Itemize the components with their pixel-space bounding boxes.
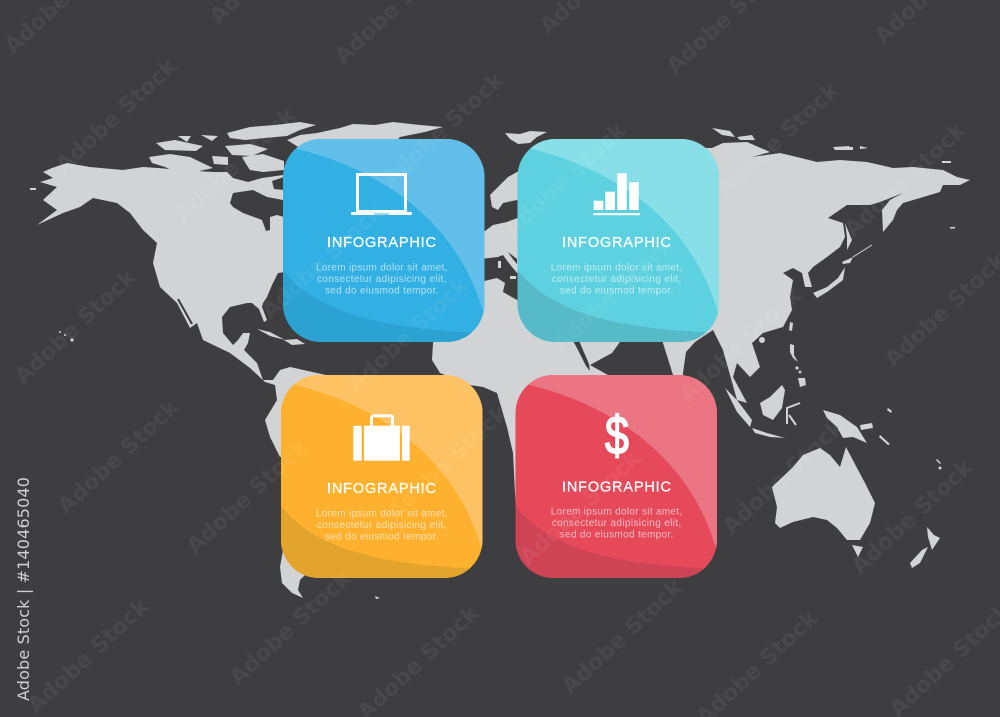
heading: INFOGRAPHIC xyxy=(327,481,436,497)
continent: North America xyxy=(37,163,340,598)
island: New Guinea xyxy=(823,410,867,443)
watermarks: Adobe Stock xyxy=(51,53,183,178)
watermarks: Adobe Stock xyxy=(557,574,689,699)
heading: INFOGRAPHIC xyxy=(562,235,671,251)
card base xyxy=(516,375,718,578)
body text: sed do eiusmod tempor. xyxy=(325,532,438,542)
watermarks: Adobe Stock xyxy=(847,454,979,579)
islands: Japan xyxy=(813,223,853,298)
watermarks: Adobe Stock xyxy=(170,102,302,227)
continent: Australia xyxy=(772,447,875,540)
island chain: Kuril xyxy=(853,245,872,257)
heading: INFOGRAPHIC xyxy=(327,235,436,251)
islands: Caribbean xyxy=(257,329,305,345)
body text: consectetur adipisicing elit, xyxy=(552,518,681,529)
watermarks: Adobe Stock xyxy=(840,117,972,242)
body text: Lorem ipsum dolor sit amet, xyxy=(316,262,447,274)
card base xyxy=(281,375,483,578)
card: red dollar xyxy=(516,375,718,578)
island: Sardinia xyxy=(498,261,501,268)
body text: Lorem ipsum dolor sit amet, xyxy=(551,262,682,274)
body text: consectetur adipisicing elit, xyxy=(317,520,446,531)
icon: laptop xyxy=(351,174,412,215)
card: blue laptop xyxy=(283,139,485,342)
watermarks: Adobe Stock xyxy=(718,414,850,539)
sea: Adriatic xyxy=(508,252,517,264)
body text xyxy=(551,506,682,540)
body text xyxy=(316,508,447,542)
islands: Philippines xyxy=(790,344,806,387)
body text: sed do eiusmod tempor. xyxy=(325,286,438,296)
icon: dollar sign: $ xyxy=(605,407,629,466)
watermarks: Adobe Stock xyxy=(225,565,357,690)
island: Sicily xyxy=(510,276,516,279)
icon: bar chart xyxy=(593,173,640,215)
island: Hainan xyxy=(759,337,765,343)
island: Tasmania xyxy=(852,545,863,557)
watermarks: Adobe Stock xyxy=(382,400,514,525)
card: orange briefcase xyxy=(281,375,483,578)
body text: consectetur adipisicing elit, xyxy=(552,274,681,285)
island: Sumatra xyxy=(725,388,752,427)
body text: sed do eiusmod tempor. xyxy=(560,286,673,296)
watermarks: Adobe Stock xyxy=(548,232,680,357)
island: Java xyxy=(752,428,785,438)
islands: New Zealand xyxy=(910,527,940,568)
heading: INFOGRAPHIC xyxy=(562,480,671,496)
card base xyxy=(283,139,485,342)
vertical credit text: Adobe Stock | #140465040 xyxy=(14,477,33,701)
card: cyan chart xyxy=(518,139,720,342)
watermarks: Adobe Stock xyxy=(23,593,155,717)
world map xyxy=(30,122,970,599)
watermarks: Adobe Stock xyxy=(182,434,314,559)
body text: Lorem ipsum dolor sit amet, xyxy=(551,506,682,518)
continents: Eurasia and Africa xyxy=(432,142,970,560)
island: Sulawesi xyxy=(787,403,800,425)
watermarks: Adobe Stock xyxy=(675,282,807,407)
body text: consectetur adipisicing elit, xyxy=(317,274,446,285)
watermarks: Adobe Stock xyxy=(500,117,632,242)
island: Greenland xyxy=(287,122,443,148)
watermarks: Adobe Stock xyxy=(343,272,475,397)
watermarks: Adobe Stock xyxy=(53,394,185,519)
islands: Arctic Canada xyxy=(149,122,316,174)
watermarks: Adobe Stock xyxy=(515,445,647,570)
card base xyxy=(518,139,720,342)
sea: Mediterranean xyxy=(480,255,525,300)
island: Borneo xyxy=(760,385,785,420)
island: Taiwan xyxy=(789,322,793,331)
island: Svalbard xyxy=(505,131,547,144)
sea: Red Sea xyxy=(570,335,590,371)
body text: Lorem ipsum dolor sit amet, xyxy=(316,508,447,520)
body text: sed do eiusmod tempor. xyxy=(560,530,673,540)
watermarks: Adobe Stock xyxy=(10,264,142,389)
bay: Hudson Bay xyxy=(230,190,284,231)
islands: Pacific xyxy=(30,128,955,599)
watermarks: Adobe Stock xyxy=(713,77,845,202)
watermarks: Adobe Stock xyxy=(378,67,510,192)
icon: briefcase xyxy=(353,416,410,461)
body text xyxy=(316,262,447,296)
body text xyxy=(551,262,682,296)
watermarks: Adobe Stock xyxy=(257,199,389,324)
sea: northern channel xyxy=(272,177,284,190)
gulf: California xyxy=(178,299,192,324)
